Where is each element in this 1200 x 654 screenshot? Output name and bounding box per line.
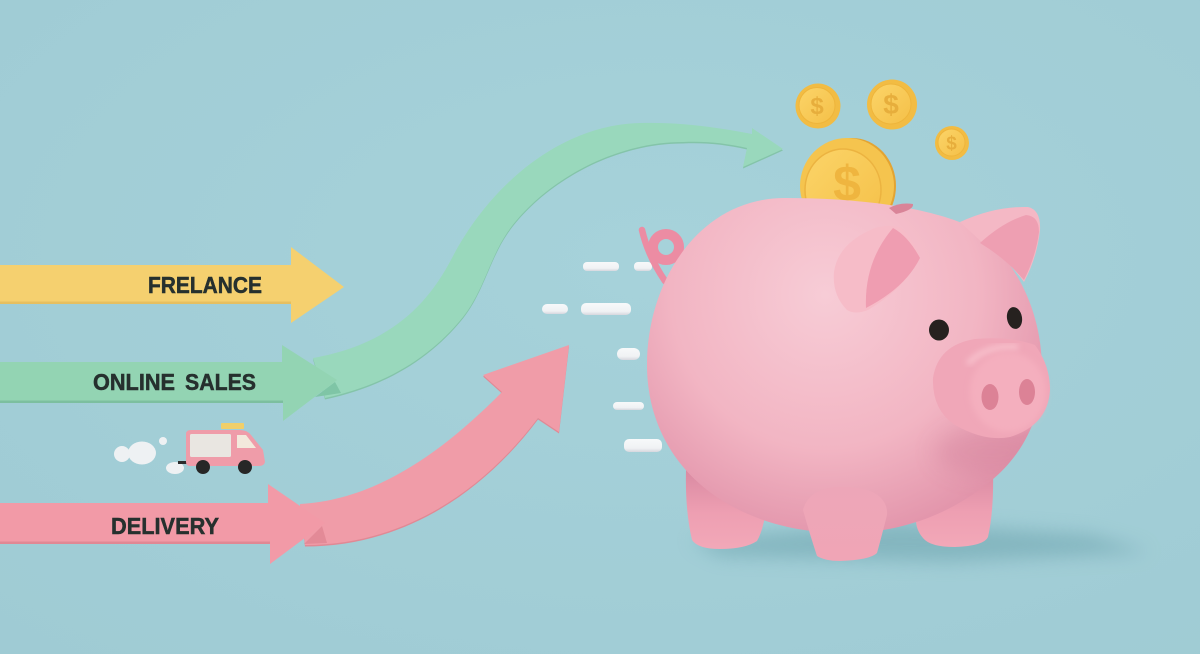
icon: floating coin middle: $: [883, 89, 899, 120]
label: online sales: [93, 369, 256, 395]
infographic: income streams into piggy bank: [0, 80, 1136, 570]
pig far ear: [960, 207, 1040, 282]
icon: floating coin right: $: [946, 134, 957, 154]
label: online sales: ONLINE: [93, 369, 175, 395]
arrow: yellow freelance: [0, 247, 344, 323]
pig nostrils: [982, 379, 1035, 410]
arrow: green online sales: [0, 345, 337, 421]
icon: piggy bank: [647, 198, 1050, 561]
icon: large coin entering slot: $: [833, 156, 861, 212]
icon: delivery van with clouds: [114, 423, 265, 474]
speed lines: [542, 262, 662, 452]
icon: pig tail: [642, 230, 679, 281]
pig eyes: [929, 306, 1024, 340]
label: online sales: SALES: [185, 369, 256, 395]
pig snout: [933, 338, 1050, 438]
pig rear legs: [686, 470, 993, 549]
label: frelance: FRELANCE: [148, 272, 262, 298]
coin slot: [889, 204, 913, 214]
arrow: pink delivery: [0, 484, 325, 564]
arrow: green curved to coins: [313, 123, 783, 399]
pig front leg: [803, 487, 887, 561]
icon: floating coin left: [796, 84, 840, 128]
arrow: pink curved upward: [300, 345, 569, 546]
icon: floating coin middle: [867, 80, 917, 130]
icon: large coin entering slot: [800, 138, 896, 234]
icon: floating coin right: [935, 126, 969, 160]
shadow under snout: [940, 431, 1024, 470]
icon: floating coin left: $: [810, 93, 824, 120]
pig near ear: [834, 226, 920, 312]
ground shadow under pig: [690, 522, 1150, 562]
pig body: [647, 198, 1042, 533]
label: delivery: DELIVERY: [111, 513, 219, 539]
